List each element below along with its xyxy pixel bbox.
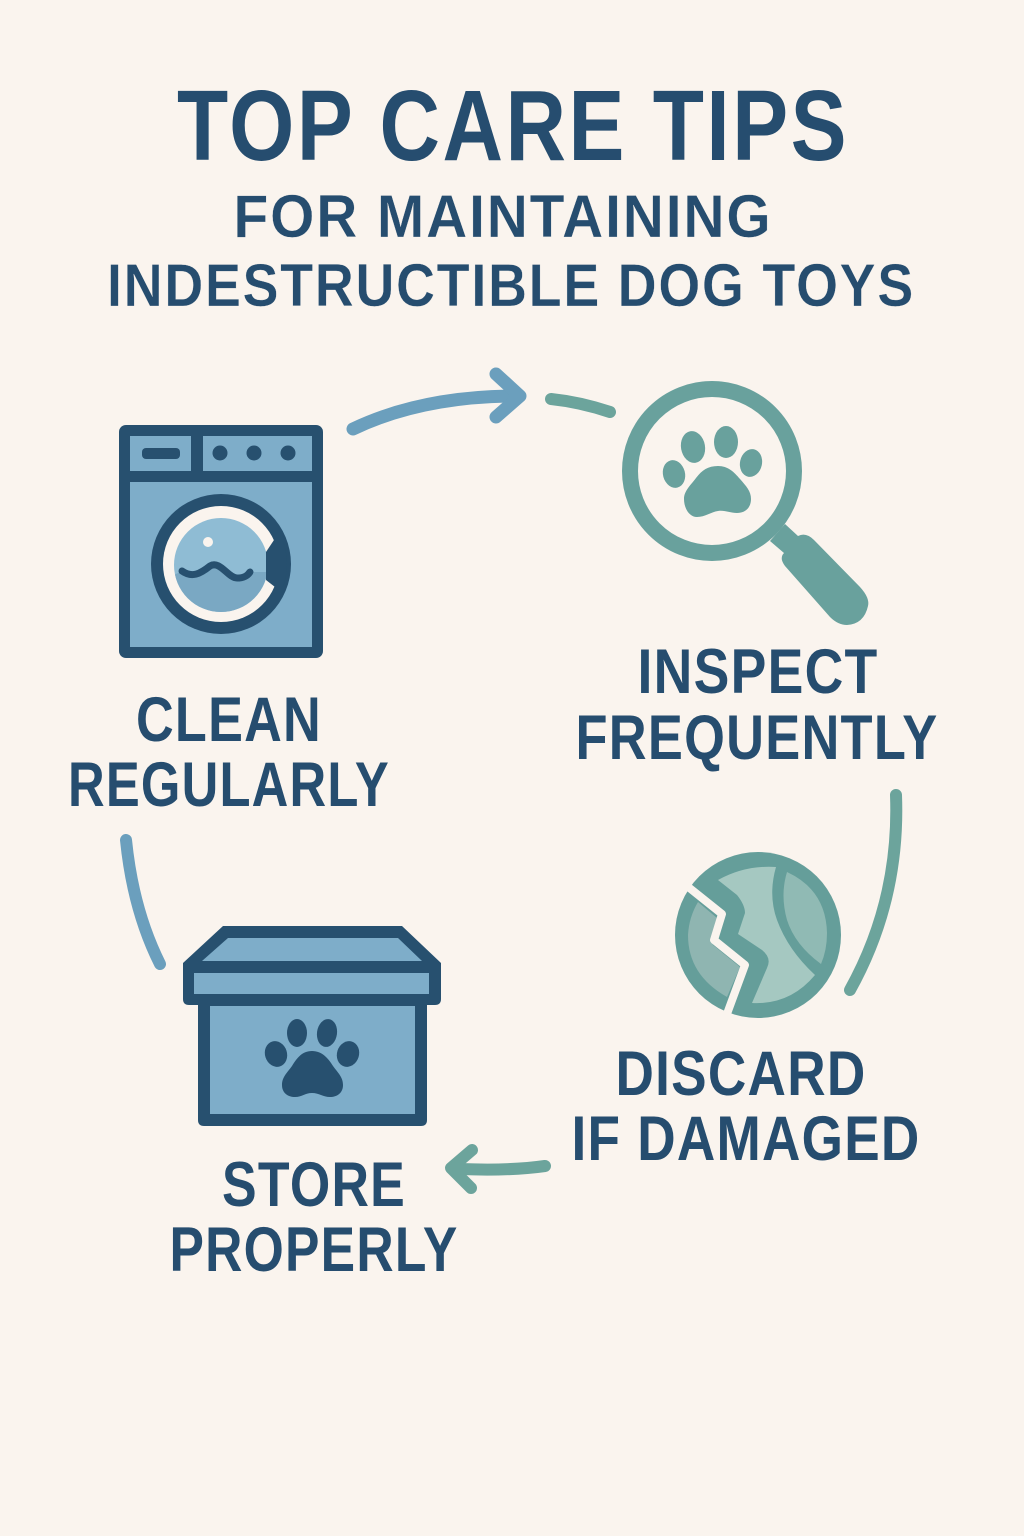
icon: washing machine: [119, 425, 323, 658]
label: clean regularly: [68, 685, 390, 820]
icon: storage box with paw: [183, 926, 441, 1126]
label: inspect frequently: INSPECT: [638, 637, 878, 707]
label: discard if damaged: DISCARD: [616, 1039, 866, 1109]
subtitle: [107, 183, 915, 319]
subtitle: INDESTRUCTIBLE DOG TOYS: [107, 252, 915, 319]
label: inspect frequently: FREQUENTLY: [576, 703, 938, 773]
label: discard if damaged: [572, 1039, 920, 1174]
label: clean regularly: CLEAN: [136, 685, 322, 755]
label: store properly: PROPERLY: [170, 1215, 458, 1285]
label: store properly: STORE: [222, 1150, 406, 1220]
label: discard if damaged: IF DAMAGED: [572, 1104, 920, 1174]
arrow: dash toward inspect: [551, 399, 610, 412]
arrow: discard to store: [451, 1150, 545, 1188]
arrow: inspect to discard: [850, 795, 896, 990]
subtitle: FOR MAINTAINING: [234, 183, 772, 250]
label: store properly: [170, 1150, 458, 1285]
title: TOP CARE TIPS: [177, 70, 849, 182]
label: clean regularly: REGULARLY: [68, 750, 390, 820]
label: inspect frequently: [576, 637, 938, 773]
arrow: store to clean: [126, 840, 160, 964]
arrow: clean to inspect: [353, 374, 520, 429]
icon: cracked ball: [675, 852, 841, 1022]
icon: magnifying glass with paw: [630, 389, 868, 625]
